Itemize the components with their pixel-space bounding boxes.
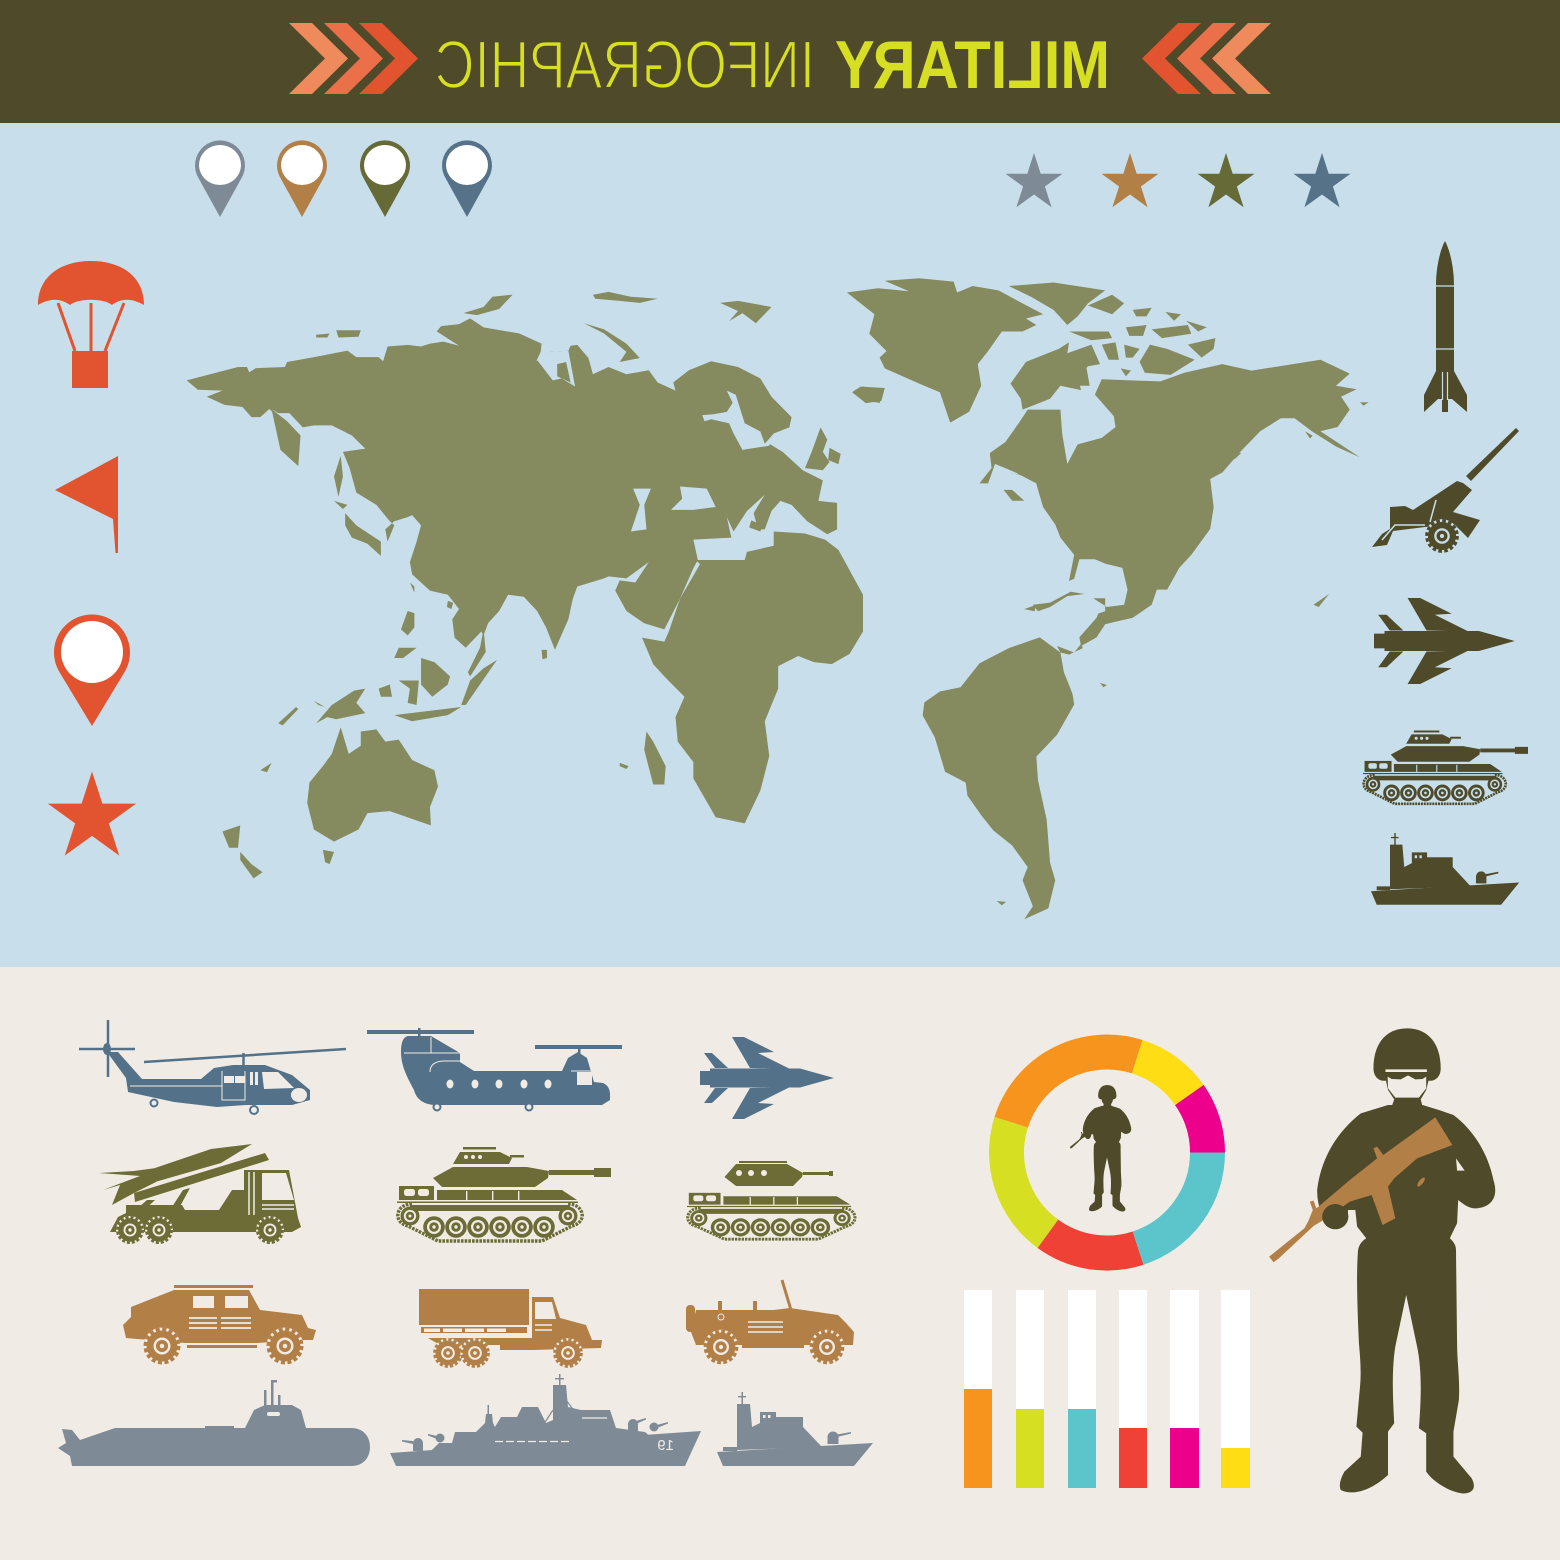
- icon: light tank: [687, 1161, 855, 1239]
- header banner: [0, 0, 1560, 123]
- icon: destroyer: [390, 1374, 701, 1466]
- icon: parachute: [38, 261, 144, 388]
- bar chart: [964, 1290, 1250, 1488]
- icon: tank: [1363, 730, 1528, 804]
- icon: cargo truck: [419, 1289, 602, 1368]
- armour row: [99, 1144, 855, 1244]
- utility vehicles row: [123, 1280, 854, 1368]
- icon: red location pin: [54, 615, 130, 726]
- icon: gray patrol boat: [717, 1392, 873, 1466]
- Eurasia, Africa, Australia and Asian islands: [187, 292, 880, 878]
- hull number (mirrored): 19: [657, 1437, 674, 1454]
- title (mirrored): MILITARY: [835, 27, 1110, 103]
- icon: attack helicopter: [79, 1020, 346, 1114]
- Americas, Greenland and Arctic islands: [847, 278, 1369, 919]
- icon: left chevrons: [289, 23, 418, 94]
- icon: submarine: [58, 1380, 370, 1466]
- icon: small soldier in donut: [1070, 1085, 1131, 1212]
- icon: large soldier with rifle: [1269, 1028, 1495, 1493]
- icon: open jeep: [686, 1280, 854, 1364]
- donut chart: [1007, 1052, 1208, 1253]
- icon: rocket: [1424, 241, 1467, 412]
- banner background: [0, 0, 1560, 123]
- world map: [187, 278, 1369, 919]
- icon: fighter jet: [1374, 598, 1515, 684]
- icon: main battle tank: [397, 1147, 611, 1241]
- map pins row: [195, 140, 492, 217]
- icon: red star: [48, 772, 136, 856]
- title (mirrored): [435, 27, 1110, 103]
- aircraft row: [79, 1020, 834, 1119]
- icon: missile launcher truck: [99, 1144, 301, 1244]
- icon: artillery cannon: [1372, 428, 1519, 553]
- title (mirrored): INFOGRAPHIC: [435, 27, 815, 103]
- icon: transport helicopter: [367, 1028, 622, 1110]
- icon: flag: [55, 456, 118, 553]
- icon: right chevrons: [1142, 23, 1271, 94]
- icon: patrol boat: [1371, 833, 1519, 905]
- right column icons: [1363, 241, 1528, 905]
- stars row: [1006, 153, 1350, 207]
- panel: world map sky-blue area: [0, 123, 1560, 967]
- soldiers: [1070, 1028, 1495, 1493]
- icon: humvee: [123, 1285, 316, 1364]
- icon: blue fighter jet: [700, 1037, 834, 1119]
- naval row: [58, 1374, 873, 1466]
